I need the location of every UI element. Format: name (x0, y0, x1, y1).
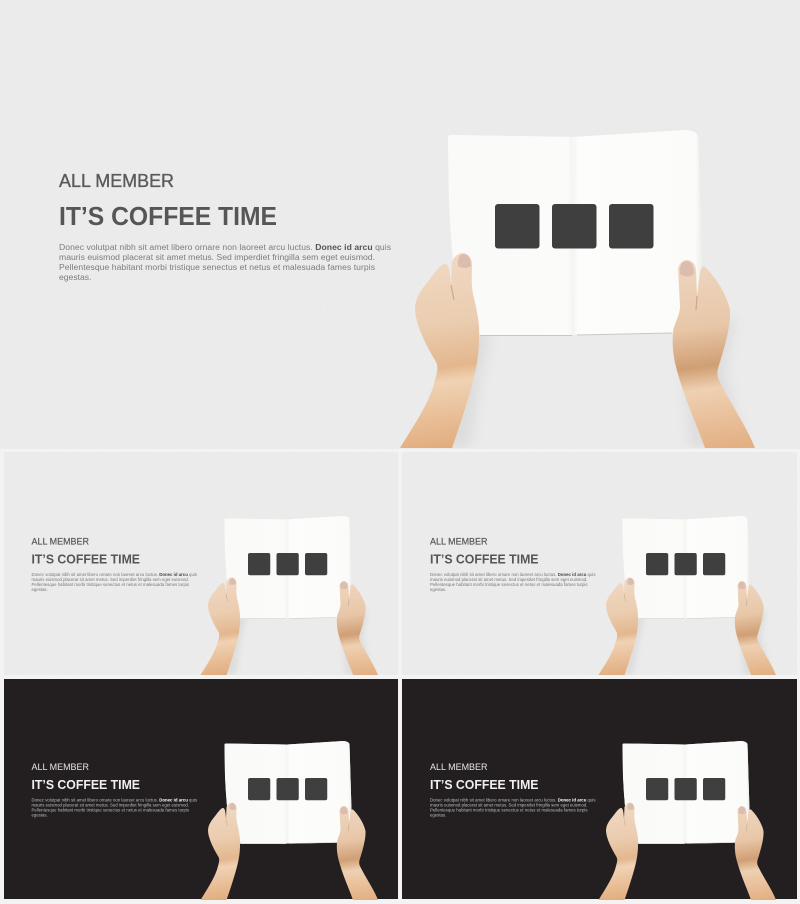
title: IT’S COFFEE TIME (59, 203, 277, 231)
body text: mauris euismod placerat sit amet metus. Sed imperdiet fringilla sem eget euismod. (59, 252, 375, 262)
text block: copy: Pellentesque habitant morbi tristique senectus et netus et malesuada fames turpis (430, 808, 588, 812)
panel: small light slide left (4, 452, 398, 675)
text block: copy: ALL MEMBER (32, 762, 89, 772)
text block: copy: Donec volutpat nibh sit amet libero ornare non laoreet arcu luctus. Donec id arcu quis (32, 572, 197, 577)
text block: copy: Donec volutpat nibh sit amet libero ornare non laoreet arcu luctus. Donec id arcu quis (32, 798, 197, 802)
text block: copy: mauris euismod placerat sit amet metus. Sed imperdiet fringilla sem eget euismod. (32, 577, 189, 582)
text block: copy (32, 536, 197, 592)
illustration: hands holding book (598, 516, 776, 675)
illustration: hands holding book (200, 516, 378, 675)
text block: copy: egestas. (32, 587, 48, 592)
text block: copy: Pellentesque habitant morbi tristique senectus et netus et malesuada fames turpis (430, 582, 588, 587)
text block: copy: IT’S COFFEE TIME (430, 552, 539, 566)
text block: copy: Pellentesque habitant morbi tristique senectus et netus et malesuada fames turpis (32, 582, 189, 587)
text block: copy: IT’S COFFEE TIME (32, 777, 140, 792)
body text (59, 242, 391, 282)
text block: copy: Pellentesque habitant morbi tristique senectus et netus et malesuada fames turpis (32, 808, 189, 812)
illustration: hands holding book (200, 741, 378, 900)
body text: egestas. (59, 272, 92, 282)
text block: copy (430, 762, 596, 818)
three dark squares (495, 204, 654, 248)
panel: small dark slide left (4, 679, 398, 900)
text block: copy: egestas. (430, 587, 446, 592)
text block: copy: ALL MEMBER (430, 762, 488, 772)
text block: copy (32, 762, 197, 818)
heading: all member: ALL MEMBER (59, 171, 174, 191)
text block: copy: mauris euismod placerat sit amet metus. Sed imperdiet fringilla sem eget euismod. (32, 802, 189, 808)
text block: copy (430, 536, 596, 592)
text block: copy: egestas. (430, 812, 446, 818)
illustration: hands holding book (400, 130, 755, 448)
text block: large slide copy (59, 171, 391, 282)
panel: small light slide right (402, 452, 797, 675)
text block: copy: Donec volutpat nibh sit amet libero ornare non laoreet arcu luctus. Donec id arcu quis (430, 572, 596, 577)
illustration: hands holding book (598, 741, 776, 900)
text block: copy: IT’S COFFEE TIME (430, 777, 539, 792)
text block: copy: Donec volutpat nibh sit amet libero ornare non laoreet arcu luctus. Donec id arcu quis (430, 798, 596, 802)
text block: copy: mauris euismod placerat sit amet metus. Sed imperdiet fringilla sem eget euismod. (430, 802, 588, 808)
body text: Donec volutpat nibh sit amet libero ornare non laoreet arcu luctus. Donec id arcu quis (59, 242, 391, 252)
text block: copy: ALL MEMBER (32, 536, 89, 546)
text block: copy: IT’S COFFEE TIME (32, 552, 140, 566)
panel: small dark slide right (402, 679, 797, 900)
text block: copy: ALL MEMBER (430, 536, 488, 546)
text block: copy: egestas. (32, 812, 48, 818)
panel: large light slide (0, 0, 800, 449)
body text: Pellentesque habitant morbi tristique senectus et netus et malesuada fames turpis (59, 262, 375, 272)
text block: copy: mauris euismod placerat sit amet metus. Sed imperdiet fringilla sem eget euismod. (430, 577, 588, 582)
